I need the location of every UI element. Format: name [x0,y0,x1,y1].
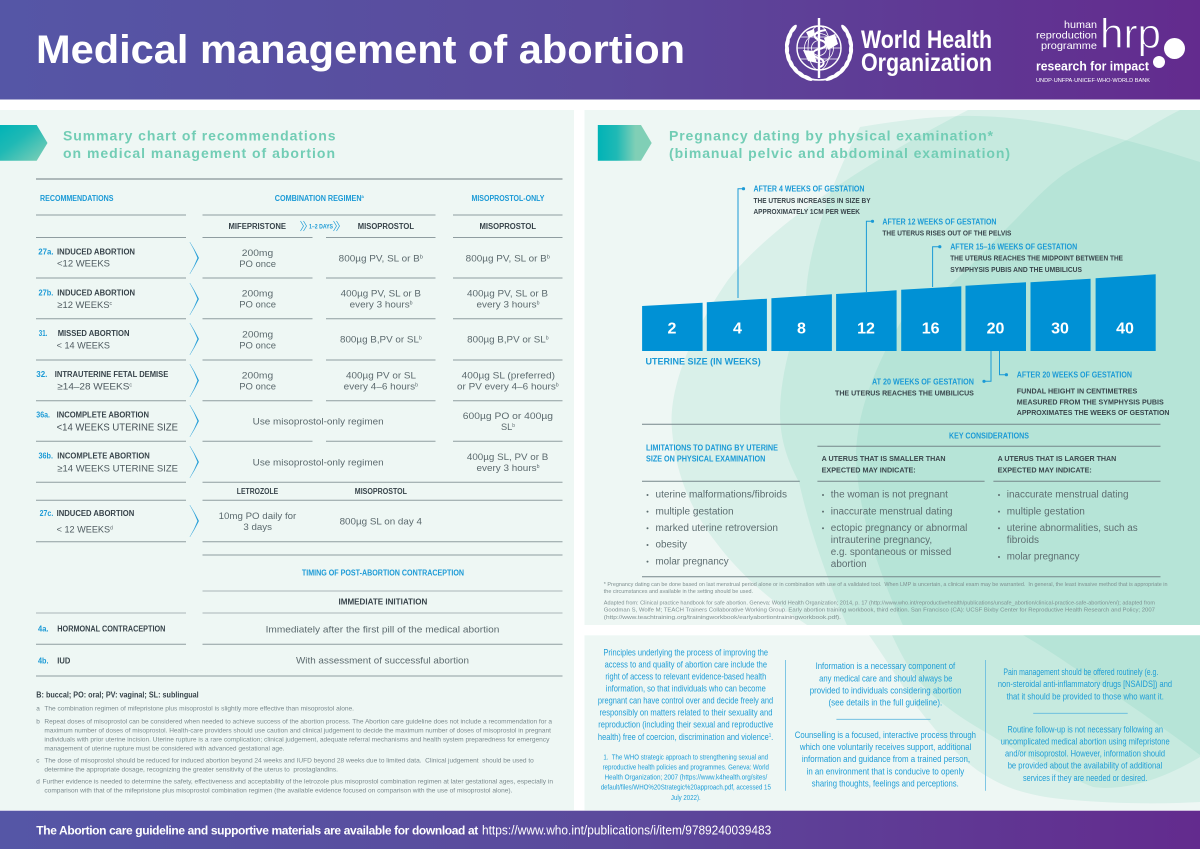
row 32: PO once [239,381,276,392]
key considerations heading: KEY CONSIDERATIONS [949,431,1030,440]
contraception timing header: TIMING OF POST-ABORTION CONTRACEPTION [302,569,464,578]
row 31: 800µg B,PV or SL [467,335,543,346]
row 27b: 27b. [38,288,53,298]
row 27b: PO once [239,300,276,311]
row 31: b [419,336,422,342]
row 32: 32. [36,370,47,379]
letrozole sub-header [237,487,407,496]
column: larger uterus: multiple gestation [1007,506,1085,517]
callout: after 12 weeks: THE UTERUS RISES OUT OF THE PELVIS [882,228,1011,237]
row 32: every 4–6 hours [344,381,412,392]
text column: principles: Principles underlying the process of improving the [603,647,768,657]
callout: after 4 weeks: AFTER 4 WEEKS OF GESTATION [754,185,865,194]
chart: uterine size bars [642,274,1156,351]
text column: pain management and follow-up: and/or misoprostol. However, information should [1005,749,1165,759]
table header: MISOPROSTOL-ONLY [472,194,545,203]
source notes: * Pregnancy dating can be done based on last menstrual period alone or in combination with use of a validated tool. When LMP is uncertain, a clinical exam may be warranted. In general, the least invasive method that is appropriate in [604,582,1168,588]
row 36a: SL [501,422,513,433]
row 4b: 4b. [38,656,48,665]
row 27a: <12 WEEKS [57,259,110,270]
row 4b: IUD [57,656,71,665]
source notes: Goodman S, Wolfe M; TEACH Trainers Collaborative Working Group. Early abortion training workbook, third edition. San Francisco (CA): UCSF Bixby Center for Reproductive Health Research and Policy; 2007 [604,608,1155,614]
column: limitations to dating: SIZE ON PHYSICAL EXAMINATION [646,454,765,463]
column: larger uterus [998,454,1138,563]
row 31: 31. [39,329,47,338]
text column: principles: responsibly on matters related to their sexuality and [600,707,772,717]
logo wordmark: World Health [861,26,992,54]
row 27b: every 3 hours [350,300,407,311]
logo: HRP: UNDP·UNFPA·UNICEF·WHO·WORLD BANK [1036,78,1150,84]
row 36b: INCOMPLETE ABORTION [57,452,150,461]
panel: principles of care [584,635,1200,810]
callout: after 20 weeks: AFTER 20 WEEKS OF GESTATION [1017,370,1132,379]
logo wordmark [861,26,992,77]
footnotes: Further evidence is needed to determine the safety, effectiveness and acceptability of the letrozole plus misoprostol combination regimen at later gestational ages, especially in [42,779,553,786]
chart: uterine size bars: 16 [922,320,940,338]
heading: summary chart [63,128,336,161]
callout: after 4 weeks: APPROXIMATELY 1CM PER WEEK [754,207,860,216]
row 36a: 600µg PO or 400µg [463,411,553,422]
row 36b [38,446,548,478]
footnotes: maximum number of doses of misoprostol. Health-care providers should use caution and clinical judgement to decide the maximum number of doses of misoprostol in pregnant [44,727,551,734]
row 27a: PO once [239,259,276,270]
row 36a: b [512,423,515,429]
logo: HRP: programme [1041,40,1097,52]
footnotes: Repeat doses of misoprostol can be considered when needed to achieve success of the abortion process. The Abortion care guideline does not include a recommendation for a [44,718,552,725]
row 27b: 200mg [242,289,273,300]
callout: after 12 weeks: AFTER 12 WEEKS OF GESTATION [882,217,997,226]
chart: uterine size bars: 12 [857,320,875,338]
text column: information and counselling: which one voluntarily receives support, additional [799,742,971,752]
text column: information and counselling: (see details in the full guideline). [828,698,942,708]
row 27c: 27c. [40,509,53,518]
logo: World Health Organization [784,18,992,82]
row 4a: Immediately after the first pill of the medical abortion [266,624,499,635]
letrozole sub-header: LETROZOLE [237,487,279,496]
text column: principles: 1 [769,733,771,739]
column: smaller uterus: EXPECTED MAY INDICATE: [822,465,916,474]
column: smaller uterus: A UTERUS THAT IS SMALLER THAN [822,454,946,463]
icon: section tab [0,125,48,161]
column: smaller uterus: e.g. spontaneous or missed [831,547,951,558]
row 27a: 800µg PV, SL or B [339,254,416,264]
logo: HRP [1036,10,1185,84]
table header: MISOPROSTOL [358,222,414,231]
row 32: b [415,382,418,388]
row 36b: Use misoprostol-only regimen [253,457,384,468]
text column: information and counselling: Information is a necessary component of [816,661,956,671]
column: larger uterus: uterine abnormalities, such as [1007,523,1138,534]
callout: after 15–16 weeks: AFTER 15–16 WEEKS OF GESTATION [950,243,1077,252]
row 31 [39,323,549,355]
contraception timing header: IMMEDIATE INITIATION [338,598,428,607]
column: smaller uterus [822,454,967,570]
column: larger uterus: EXPECTED MAY INDICATE: [998,465,1092,474]
row 27c [40,505,422,537]
heading: pregnancy dating [669,128,1010,161]
row 27b: every 3 hours [476,300,534,311]
icon: 1–2 days arrows [300,221,340,231]
source notes: the circumstances and available in the setting should be used. [604,589,753,595]
text column: principles: information, so that individuals who can become [606,683,766,693]
row 31: 200mg [242,330,273,341]
callout: at 20 weeks: AT 20 WEEKS OF GESTATION [872,378,974,387]
text column: information and counselling: in an environment that is conducive to openly [807,766,965,776]
row 31: b [546,336,549,342]
icon: WHO emblem [784,18,854,82]
text column: information and counselling: any medical care and should always be [819,673,952,683]
chart: uterine size bars: 40 [1116,320,1134,338]
column: smaller uterus: intrauterine pregnancy, [831,535,932,546]
row 32: 400µg SL (preferred) [462,371,555,382]
footnotes: c [36,757,40,764]
text column: information and counselling: Counselling is a focused, interactive process through [795,730,976,740]
row 27a: 27a. [38,248,54,257]
text column: pain management and follow-up: be provided about the availability of additional [1008,761,1162,771]
source notes: Adapted from: Clinical practice handbook for safe abortion. Geneva: World Health Organization; 2014, p. 17 (http://www.who.int/reproductivehealth/publications/unsafe_abortion/clinical-practice-safe-abortion/en/); adapted from [604,601,1155,607]
callout: after 20 weeks: MEASURED FROM THE SYMPHYSIS PUBIS [1017,397,1164,406]
chart: uterine size bars: 2 [668,320,677,338]
row 32: or PV every 4–6 hours [457,381,552,392]
text column: principles: access to and quality of abortion care include the [605,659,767,669]
row 31: 800µg B,PV or SL [340,335,416,346]
column: limitations to dating: molar pregnancy [656,556,729,567]
text column: principles: . [771,732,773,742]
text column: pain management and follow-up: services if they are needed or desired. [1023,773,1147,783]
footnotes: The combination regimen of mifepristone plus misoprostol is slightly more effective than misoprostol alone. [44,706,354,713]
row 27c: INDUCED ABORTION [57,509,135,518]
callout: after 4 weeks: THE UTERUS INCREASES IN SIZE BY [754,196,871,205]
row 36a: Use misoprostol-only regimen [253,416,384,427]
header band [0,0,1200,100]
chart: uterine size bars: 8 [797,320,806,338]
logo: HRP: research for impact [1036,60,1150,74]
row 36b: every 3 hours [476,463,534,474]
footnotes: d [36,779,40,786]
row 36b: b [537,464,540,470]
row 32: 400µg PV or SL [346,371,416,382]
row 4b [38,656,469,667]
callout: after 15–16 weeks [933,243,1123,287]
column: limitations to dating: uterine malformations/fibroids [656,490,787,501]
chart: uterine size bars: 30 [1051,320,1069,338]
row 32: c [129,382,133,388]
letrozole sub-header: MISOPROSTOL [355,487,407,496]
row 27b: b [537,301,540,307]
text column: principles: 1. The WHO strategic approach to strengthening sexual and [603,752,768,761]
table header [40,194,545,231]
callout: after 20 weeks: APPROXIMATES THE WEEKS OF GESTATION [1017,408,1170,417]
footnotes: individuals with prior uterine incision. Uterine rupture is a rare complication; clinical judgement, adequate referral mechanisms and health system preparedness for emergency [44,736,550,743]
abbreviations: B: buccal; PO: oral; PV: vaginal; SL: sublingual [36,690,199,699]
footnotes: The dose of misoprostol should be reduced for induced abortion beyond 24 weeks and IUFD beyond 28 weeks due to limited data. Clinical judgement should be used to [44,757,534,764]
row 27b: c [110,301,112,307]
footnotes: determine the appropriate dosage, recognizing the greater sensitivity of the uterus to prostaglandins. [44,766,338,773]
callout: after 12 weeks [866,217,1011,292]
table header: RECOMMENDATIONS [40,194,114,203]
heading: pregnancy dating: Pregnancy dating by physical examination* [669,128,994,144]
column: limitations to dating: marked uterine retroversion [656,523,778,534]
column: smaller uterus: ectopic pregnancy or abnormal [831,523,967,534]
row 27b: ≥12 WEEKS [57,300,110,311]
text column: principles: reproductive health policies and programmes. Geneva: World [603,762,769,771]
column: smaller uterus: inaccurate menstrual dating [831,506,952,517]
row 4a: HORMONAL CONTRACEPTION [57,624,166,633]
chart: uterine size bars: 20 [987,320,1004,338]
table header: COMBINATION REGIMEN [275,194,371,203]
row 32: b [556,382,559,388]
heading: pregnancy dating: (bimanual pelvic and abdominal examination) [669,145,1010,161]
logo: HRP: hrp [1100,10,1161,57]
column: smaller uterus: abortion [831,559,867,570]
column: larger uterus: A UTERUS THAT IS LARGER THAN [998,454,1116,463]
row 27c: 800µg SL on day 4 [340,517,422,528]
row 27b: INDUCED ABORTION [57,288,135,298]
text column: information and counselling [795,661,976,789]
text column: principles: pregnant can have control over and decide freely and [598,695,773,705]
heading: summary chart: Summary chart of recommendations [63,128,336,144]
row 4a: 4a. [38,624,48,633]
row 27a: INDUCED ABORTION [57,248,135,257]
footer text [36,824,771,838]
callout: after 15–16 weeks: THE UTERUS REACHES THE MIDPOINT BETWEEN THE [950,254,1123,263]
row 36b: ≥14 WEEKS UTERINE SIZE [57,463,178,474]
column: larger uterus: inaccurate menstrual dating [1007,490,1128,501]
row 36a: 36a. [36,411,50,420]
chart: uterine size bars: 4 [733,320,742,338]
row 27a: 800µg PV, SL or B [466,254,543,264]
logo: HRP: human [1064,19,1097,31]
callout: after 20 weeks: FUNDAL HEIGHT IN CENTIMETRES [1017,386,1137,395]
text column: principles: health) free of coercion, discrimination and violence [598,732,807,742]
row 27a [38,242,550,274]
row 32: ≥14–28 WEEKS [57,381,126,392]
contraception timing header [302,569,464,607]
footer band [0,811,1200,849]
text column: information and counselling: provided to individuals considering abortion [810,685,962,695]
footer text: The Abortion care guideline and supportive materials are available for download at [36,824,478,838]
text column: principles: July 2022). [671,793,701,802]
callout: after 15–16 weeks: SYMPHYSIS PUBIS AND THE UMBILICUS [950,265,1082,274]
column: limitations to dating: LIMITATIONS TO DATING BY UTERINE [646,443,779,452]
row 31: PO once [239,341,276,352]
icon: 1–2 days arrows: 1–2 DAYS [309,224,333,230]
table header: MIFEPRISTONE [228,222,287,231]
footer text: https://www.who.int/publications/i/item/9789240039483 [482,824,771,838]
text column: principles: right of access to relevant evidence-based health [605,671,766,681]
column: smaller uterus: the woman is not pregnant [831,490,948,501]
text column: principles: default/files/WHO%20Strategic%20approach.pdf, accessed 15 [601,782,771,791]
table header: a [362,194,364,199]
row 32 [36,364,559,397]
row 36a: INCOMPLETE ABORTION [57,411,149,420]
row 27b: b [410,301,413,307]
callout: at 20 weeks [835,351,991,398]
row 27c: < 12 WEEKS [57,525,112,536]
text column: pain management and follow-up [998,667,1172,783]
row 27a: b [420,254,423,260]
panel: summary chart of recommendations [0,110,574,810]
row 4b: With assessment of successful abortion [296,656,469,667]
footnotes [36,706,553,795]
row 31: MISSED ABORTION [58,329,130,338]
row 36b: 36b. [38,452,53,461]
row 27a: 200mg [242,248,273,259]
logo: HRP: reproduction [1036,30,1097,42]
text column: pain management and follow-up: that it should be provided to those who want it. [1007,691,1164,701]
text column: information and counselling: sharing thoughts, feelings and perceptions. [812,779,959,789]
callout: after 20 weeks [1000,351,1170,417]
source notes: (http://www.teachtraining.org/trainingworkbook/earlyabortiontrainingworkbook.pdf). [604,615,841,621]
callout: at 20 weeks: THE UTERUS REACHES THE UMBILICUS [835,389,974,398]
callout: after 4 weeks [738,185,871,298]
row 32: 200mg [242,371,273,382]
panel: pregnancy dating [584,110,1200,630]
row 27b: 400µg PV, SL or B [467,289,548,300]
row 31: < 14 WEEKS [57,341,110,352]
text column: principles: reproduction (including their sexual and reproductive [598,720,773,730]
text column: information and counselling: information and guidance from a trained person, [802,754,970,764]
row 27c: 10mg PO daily for [219,511,296,522]
footnotes: management of uterine rupture must be considered with advanced gestational age. [44,745,285,752]
row 27b [38,283,548,315]
column: limitations to dating [646,443,787,567]
icon: section tab [598,125,652,161]
column: larger uterus: molar pregnancy [1007,552,1080,563]
row 27c: d [110,526,113,532]
text column: principles: Health Organization; 2007 (https://www.k4health.org/sites/ [605,772,768,781]
column: limitations to dating: multiple gestation [656,506,734,517]
row 27c: 3 days [243,522,272,533]
source notes [604,582,1168,621]
footnotes: a [36,706,40,713]
row 36a: <14 WEEKS UTERINE SIZE [57,422,178,433]
title: Medical management of abortion [36,28,685,72]
column: limitations to dating: obesity [656,540,687,551]
row 36b: 400µg SL, PV or B [467,452,548,463]
row 36a [36,405,553,437]
column: larger uterus: fibroids [1007,535,1039,546]
text column: pain management and follow-up: Routine follow-up is not necessary following an [1007,724,1163,734]
row 4a [38,624,499,635]
row 32: INTRAUTERINE FETAL DEMISE [55,370,169,379]
heading: summary chart: on medical management of abortion [63,145,335,161]
text column: principles [598,647,773,802]
chart axis label: UTERINE SIZE (IN WEEKS) [646,357,761,367]
logo wordmark: Organization [861,49,992,77]
row 27b: 400µg PV, SL or B [341,289,421,300]
footnotes: b [36,718,40,725]
footnotes: comparison with that of the mifepristone plus misoprostol combination regimen (the available evidence focused on comparison with the use of misoprostol alone). [44,788,513,795]
row 27a: b [547,254,550,260]
table header: MISOPROSTOL [480,222,536,231]
